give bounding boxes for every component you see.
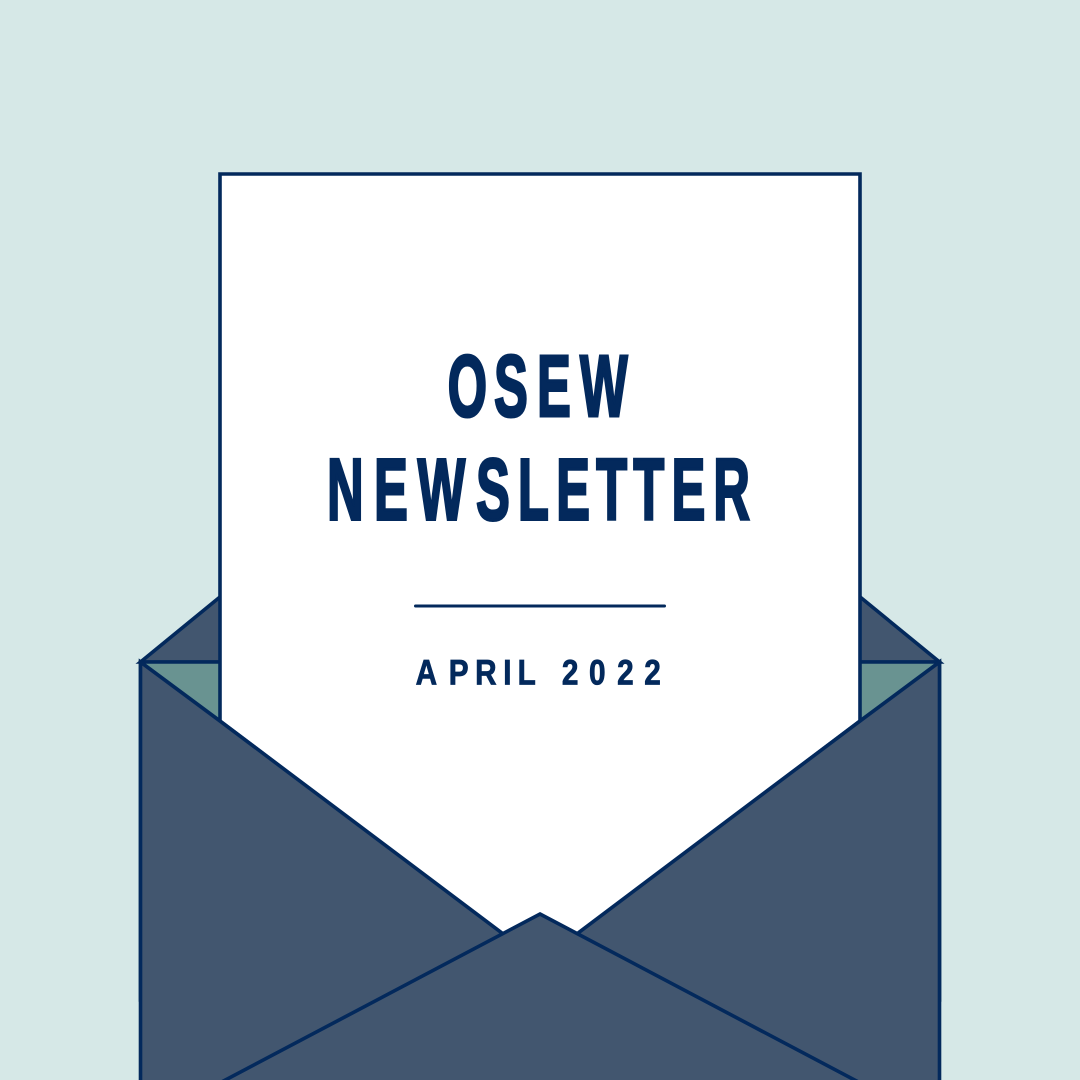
date: APRIL 2022 <box>416 653 661 692</box>
divider line <box>416 604 664 608</box>
title <box>327 339 750 539</box>
letter paper <box>220 174 860 963</box>
title line: OSEW: OSEW <box>448 339 628 436</box>
envelope left front panel <box>140 662 540 1080</box>
envelope inner lining <box>140 662 940 1000</box>
title line: NEWSLETTER: NEWSLETTER <box>327 442 750 539</box>
envelope right front panel <box>540 662 940 1080</box>
envelope bottom flap <box>214 914 866 1080</box>
envelope back flap <box>140 335 940 662</box>
